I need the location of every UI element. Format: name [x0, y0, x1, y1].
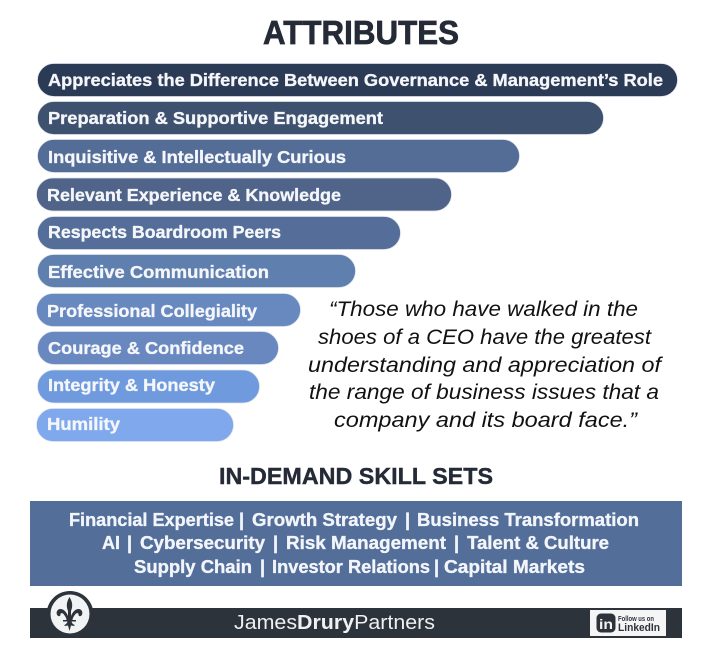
bar: respects peers: Respects Boardroom Peers [48, 222, 281, 242]
bar: courage and confidence: Courage & Confidence [48, 338, 244, 358]
panel: skill sets: Risk Management [286, 533, 446, 553]
panel: skill sets: Growth Strategy [252, 510, 397, 530]
quote: “Those who have walked in the [329, 298, 638, 321]
icon: LinkedIn badge: in [599, 616, 613, 632]
panel: skill sets: | [260, 557, 265, 577]
bar: professional collegiality [36, 294, 300, 326]
panel: skill sets: Business Transformation [417, 510, 639, 530]
quote [308, 298, 663, 432]
icon: LinkedIn badge [590, 610, 666, 636]
bar: humility: Humility [47, 414, 120, 434]
icon: LinkedIn badge: Follow us on [618, 616, 654, 623]
title: ATTRIBUTES [263, 14, 459, 51]
bar: relevant experience: Relevant Experience & Knowledge [47, 185, 341, 205]
panel: skill sets: | [127, 533, 132, 553]
icon: fleur-de-lis logo [46, 591, 94, 638]
icon: LinkedIn badge: LinkedIn [618, 622, 660, 634]
bar: integrity and honesty [38, 370, 260, 403]
bar: relevant experience [36, 178, 452, 211]
quote: the range of business issues that a [309, 381, 659, 404]
quote: shoes of a CEO have the greatest [318, 326, 652, 349]
bar: inquisitive: Inquisitive & Intellectually Curious [48, 147, 346, 167]
panel: skill sets: Talent & Culture [467, 533, 609, 553]
bar: preparation: Preparation & Supportive Engagement [48, 108, 383, 128]
panel: skill sets: Cybersecurity [140, 533, 265, 553]
panel: skill sets: Investor Relations [272, 557, 430, 577]
panel: skill sets [30, 501, 682, 586]
panel: skill sets: | [434, 557, 439, 577]
brand name: JamesDruryPartners [234, 611, 435, 634]
panel: skill sets: Supply Chain [134, 557, 252, 577]
bar: courage and confidence [38, 332, 278, 364]
panel: skill sets: Financial Expertise [69, 510, 234, 530]
bar: preparation [38, 102, 604, 134]
bar: humility [36, 408, 234, 442]
panel: skill sets: | [239, 510, 244, 530]
panel: skill sets: | [273, 533, 278, 553]
bar chart: attributes [36, 64, 678, 442]
panel: skill sets: | [454, 533, 459, 553]
quote: company and its board face.” [334, 409, 638, 432]
panel: skill sets: Capital Markets [444, 557, 585, 577]
bar: effective communication: Effective Communication [48, 262, 269, 282]
skill sets heading: IN-DEMAND SKILL SETS [219, 463, 493, 489]
panel: skill sets: AI [102, 533, 120, 553]
bar: governance and management: Appreciates the Difference Between Governance & Management’s Role [48, 70, 663, 90]
bar: professional collegiality: Professional Collegiality [47, 301, 257, 321]
quote: understanding and appreciation of [308, 354, 663, 377]
bar: inquisitive [38, 140, 520, 172]
footer bar [30, 591, 682, 638]
bar: governance and management [38, 64, 678, 96]
bar: effective communication [38, 254, 356, 288]
bar: integrity and honesty: Integrity & Honesty [48, 375, 215, 395]
bar: respects peers [38, 216, 400, 250]
panel: skill sets: | [405, 510, 410, 530]
